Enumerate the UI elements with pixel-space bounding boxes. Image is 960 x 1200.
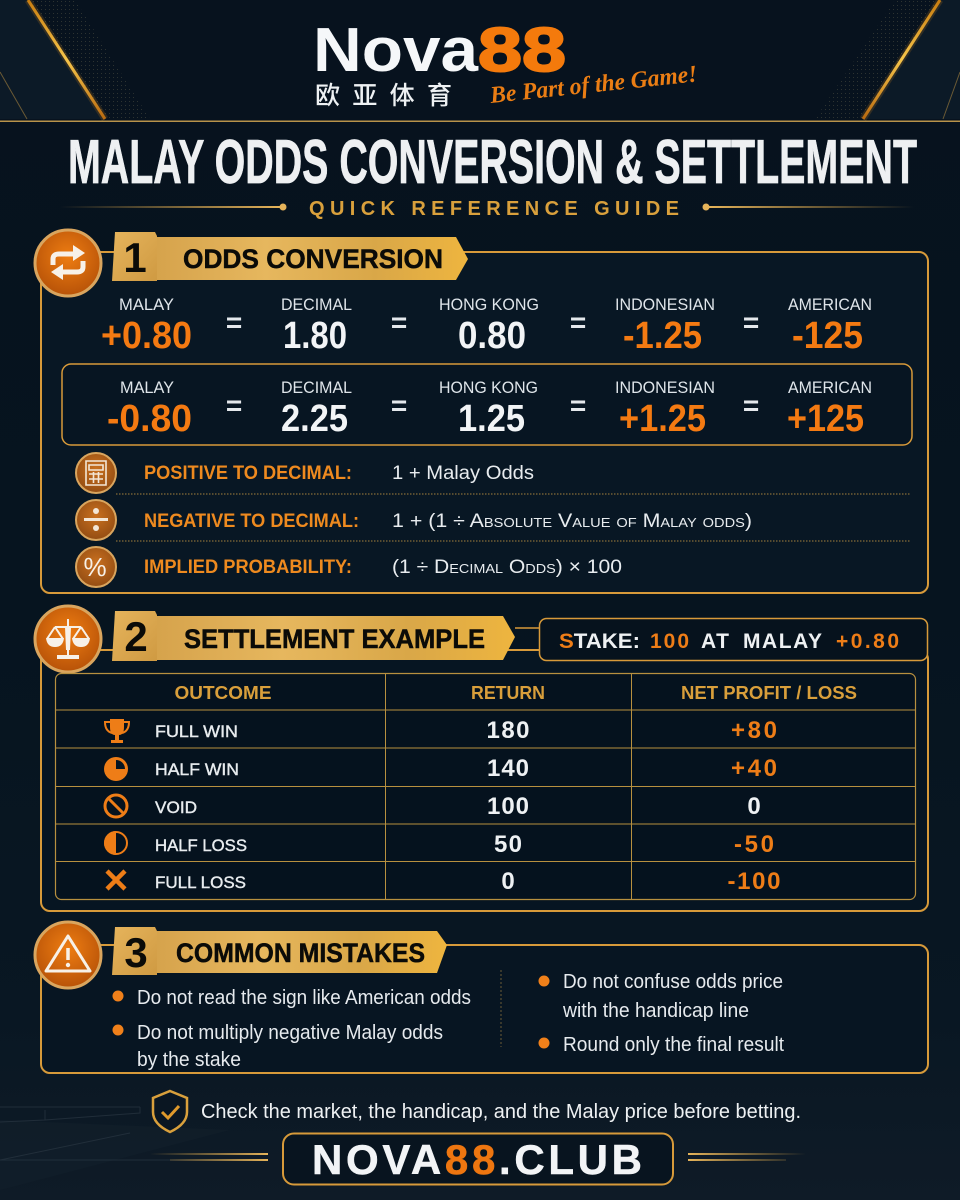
- stake callout: STAKE:: [559, 630, 640, 653]
- logo: 88: [478, 16, 566, 85]
- stake callout: [515, 618, 928, 660]
- positive odds row: DECIMAL: [281, 295, 352, 314]
- negative odds row: +125: [787, 398, 864, 440]
- row: half loss: 50: [494, 831, 522, 858]
- subtitle: [60, 198, 914, 220]
- row: half win: 140: [487, 755, 529, 782]
- subtitle: QUICK REFERENCE GUIDE: [309, 198, 679, 220]
- row: half win: HALF WIN: [155, 760, 239, 779]
- section header 2: 2: [124, 613, 148, 660]
- mistakes left column: by the stake: [137, 1049, 241, 1071]
- negative odds row: INDONESIAN: [615, 378, 715, 397]
- section header 1: 1: [123, 234, 147, 281]
- positive odds row: MALAY: [119, 295, 174, 314]
- negative odds row: MALAY: [120, 378, 174, 397]
- negative odds row: HONG KONG: [439, 378, 538, 397]
- row: full win: FULL WIN: [155, 722, 238, 741]
- row: full win: [105, 717, 777, 744]
- row: full loss: FULL LOSS: [155, 873, 246, 892]
- negative odds row: =: [743, 390, 759, 421]
- formula: negative to decimal: 1 + (1 ÷ Absolute Value of Malay odds): [392, 511, 752, 532]
- positive odds row: 0.80: [458, 315, 526, 357]
- negative odds row: =: [391, 390, 407, 421]
- reminder text: Check the market, the handicap, and the Malay price before betting.: [201, 1101, 801, 1123]
- table header: OUTCOME: [174, 683, 272, 703]
- row: void: VOID: [155, 798, 197, 817]
- formula: negative to decimal: NEGATIVE TO DECIMAL:: [144, 511, 359, 532]
- stake callout: 100: [650, 630, 689, 653]
- positive odds row: 1.80: [283, 315, 347, 357]
- stake callout: +0.80: [836, 630, 899, 653]
- section header 2: [112, 611, 515, 661]
- positive odds row: -125: [792, 315, 863, 357]
- formula: positive to decimal: POSITIVE TO DECIMAL:: [144, 463, 352, 484]
- formula: negative to decimal: [76, 500, 752, 540]
- mistakes right column: Round only the final result: [563, 1034, 784, 1056]
- logo: 欧亚体育: [315, 82, 452, 110]
- panel: settlement example: [35, 606, 928, 911]
- website button: [150, 1134, 806, 1184]
- positive odds row: +0.80: [101, 315, 192, 357]
- positive odds row: [101, 295, 872, 357]
- table header: RETURN: [471, 683, 545, 703]
- logo: Be Part of the Game!: [488, 61, 698, 109]
- icon: conversion arrows: [35, 230, 101, 296]
- positive odds row: =: [391, 307, 407, 338]
- panel: odds conversion: [35, 230, 928, 593]
- mistakes left column: Do not read the sign like American odds: [137, 987, 471, 1009]
- icon: warning: [35, 922, 101, 988]
- negative odds row: 1.25: [458, 398, 525, 440]
- positive odds row: =: [743, 307, 759, 338]
- negative odds row: =: [570, 390, 586, 421]
- negative odds row: +1.25: [619, 398, 706, 440]
- section header 2: SETTLEMENT EXAMPLE: [184, 624, 485, 654]
- stake callout: AT: [701, 630, 729, 653]
- formula: implied probability: %: [83, 552, 107, 582]
- row: void: 0: [747, 793, 761, 820]
- negative odds row: =: [226, 390, 242, 421]
- mistakes right column: with the handicap line: [562, 1000, 749, 1022]
- logo: Nova: [313, 16, 479, 85]
- negative odds row: -0.80: [107, 398, 192, 440]
- positive odds row: =: [226, 307, 242, 338]
- row: void: [105, 793, 761, 820]
- negative odds row: DECIMAL: [281, 378, 352, 397]
- row: half loss: HALF LOSS: [155, 836, 247, 855]
- row: full win: +80: [731, 717, 777, 744]
- positive odds row: HONG KONG: [439, 295, 539, 314]
- row: half win: +40: [731, 755, 777, 782]
- row: void: 100: [487, 793, 529, 820]
- icon: scales: [35, 606, 101, 672]
- logo: [313, 16, 698, 110]
- settlement table: [56, 674, 916, 900]
- mistakes left column: Do not multiply negative Malay odds: [137, 1022, 443, 1044]
- mistakes right column: [538, 971, 784, 1056]
- row: half loss: -50: [734, 831, 774, 858]
- table header: NET PROFIT / LOSS: [681, 683, 857, 703]
- formula: implied probability: [76, 547, 622, 587]
- panel: common mistakes: [35, 922, 928, 1073]
- row: full loss: -100: [728, 868, 780, 895]
- positive odds row: -1.25: [623, 315, 702, 357]
- mistakes right column: Do not confuse odds price: [563, 971, 783, 993]
- table header: [174, 683, 857, 703]
- section header 3: COMMON MISTAKES: [176, 938, 425, 968]
- stake callout: MALAY: [743, 630, 822, 653]
- section header 1: ODDS CONVERSION: [183, 244, 443, 274]
- negative odds row: [62, 364, 912, 445]
- positive odds row: AMERICAN: [788, 295, 872, 314]
- website button: NOVA88.CLUB: [312, 1136, 642, 1183]
- formula: implied probability: IMPLIED PROBABILITY:: [144, 557, 352, 578]
- row: full loss: [107, 868, 780, 895]
- negative odds row: 2.25: [281, 398, 348, 440]
- icon: shield: [153, 1091, 187, 1132]
- positive odds row: =: [570, 307, 586, 338]
- mistakes left column: [112, 987, 471, 1071]
- row: full loss: 0: [501, 868, 515, 895]
- formula: implied probability: (1 ÷ Decimal Odds) × 100: [392, 557, 622, 578]
- positive odds row: INDONESIAN: [615, 295, 715, 314]
- row: half win: [104, 755, 777, 782]
- section header 1: [112, 232, 468, 281]
- formula: positive to decimal: [76, 453, 534, 493]
- section header 3: [112, 927, 447, 976]
- row: full win: 180: [486, 717, 530, 744]
- negative odds row: AMERICAN: [788, 378, 872, 397]
- header gold accent lines: [0, 0, 960, 122]
- row: half loss: [104, 831, 774, 858]
- formula: positive to decimal: 1 + Malay Odds: [392, 463, 534, 484]
- section header 3: 3: [124, 929, 148, 976]
